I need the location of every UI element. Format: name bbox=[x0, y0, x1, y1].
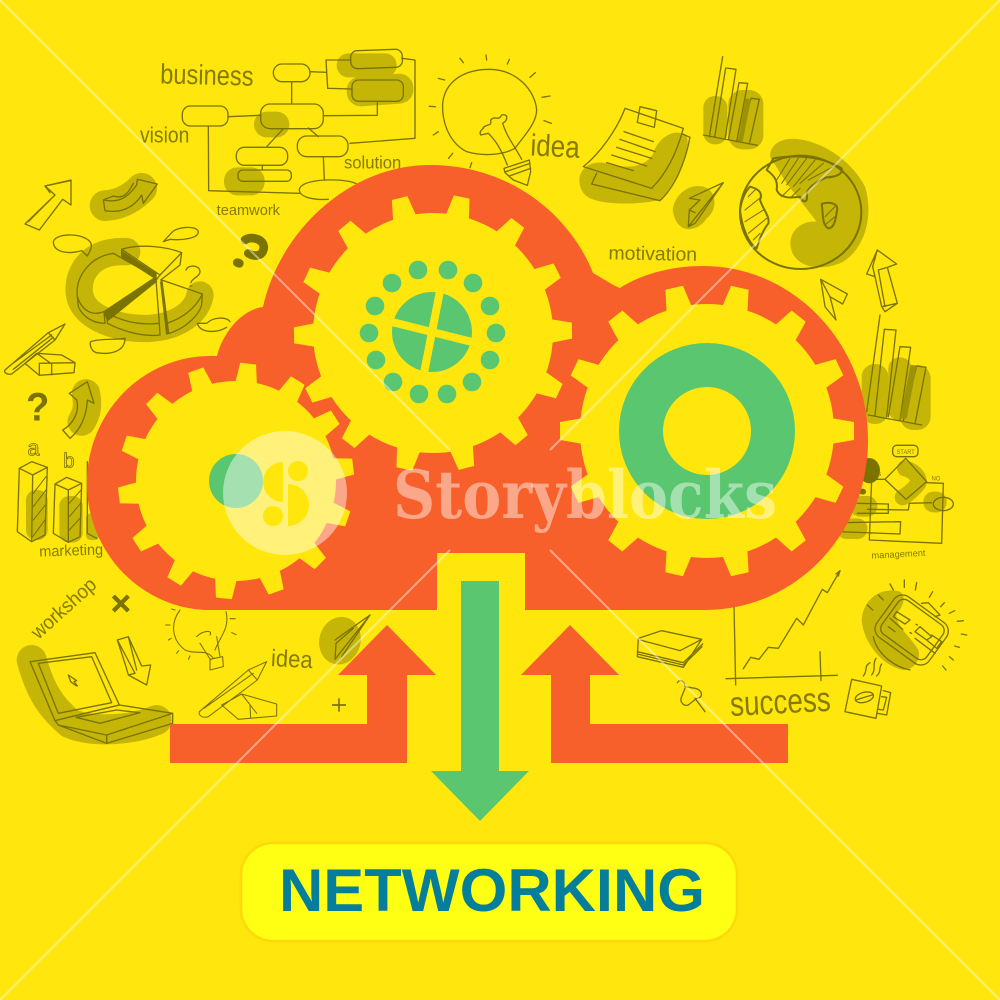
text: a: a bbox=[27, 435, 40, 460]
icon: question mark left: ? bbox=[26, 386, 49, 430]
cloud bbox=[87, 165, 868, 610]
icon: arrow down bbox=[117, 637, 151, 685]
text: teamwork: teamwork bbox=[217, 203, 281, 219]
icon: globe bbox=[740, 139, 868, 269]
text: business: business bbox=[160, 58, 254, 92]
text: start: START bbox=[897, 449, 915, 456]
icon: question mark bbox=[237, 238, 264, 263]
text: workshop: workshop bbox=[26, 574, 101, 644]
text: success: success bbox=[729, 681, 832, 724]
doodles: top right bbox=[429, 55, 931, 430]
doodles: left side bbox=[17, 382, 370, 743]
text: idea small: idea bbox=[270, 645, 314, 674]
text: idea: idea bbox=[530, 128, 581, 165]
text: solution: solution bbox=[344, 153, 401, 173]
arrow: orange left bbox=[170, 625, 436, 763]
label: networking bbox=[241, 843, 737, 941]
gear hub: quartered circle bbox=[386, 286, 478, 378]
text: marketing: marketing bbox=[39, 541, 103, 561]
text: plus bbox=[332, 698, 346, 712]
flowchart doodle bbox=[182, 49, 415, 199]
gear: centre bbox=[294, 195, 572, 471]
icon: 3d arrow left bbox=[63, 382, 94, 438]
icon: light bulb bbox=[429, 55, 551, 185]
icon: paper plane left bbox=[314, 612, 370, 669]
arrow: green down bbox=[431, 581, 529, 821]
icon: notes bbox=[579, 107, 690, 204]
gear: right bbox=[560, 285, 854, 577]
gear hub: left bbox=[209, 454, 263, 508]
management flowchart bbox=[837, 445, 953, 543]
icon: pencil and eraser bbox=[199, 662, 277, 719]
text: management: management bbox=[871, 548, 926, 561]
icon: bar chart top bbox=[703, 57, 763, 149]
text: motivation: motivation bbox=[608, 243, 697, 266]
doodles: top left bbox=[25, 49, 415, 353]
doodles: pencil and eraser upper left bbox=[5, 324, 75, 375]
text: vision: vision bbox=[140, 123, 189, 148]
icon: small bulb bbox=[166, 609, 236, 670]
dot ring bbox=[360, 261, 505, 403]
pie chart doodle bbox=[53, 227, 230, 353]
gear: left bbox=[118, 362, 354, 600]
line chart doodle bbox=[726, 571, 840, 685]
label text: NETWORKING bbox=[279, 857, 705, 924]
icon: 3d curved arrow bbox=[103, 179, 157, 211]
icon: pencil bbox=[5, 324, 65, 374]
icon: arrow up right bbox=[25, 180, 71, 230]
icon: bar chart right bbox=[862, 315, 931, 430]
arrow: orange right bbox=[521, 625, 788, 763]
text: yes: YES bbox=[871, 472, 882, 478]
icon: 3d bars a b bbox=[17, 462, 99, 543]
icon: smartwatch bbox=[862, 580, 967, 670]
doodles: right side bbox=[637, 445, 967, 724]
watermark logo bbox=[263, 461, 309, 526]
icon: cross bbox=[113, 596, 128, 611]
icon: eraser bbox=[25, 353, 75, 375]
gear hub: green ring bbox=[641, 365, 773, 497]
watermark text: Storyblocks bbox=[393, 456, 777, 534]
icon: paper plane bbox=[673, 183, 723, 229]
text: b: b bbox=[63, 450, 74, 472]
text: no: NO bbox=[932, 477, 941, 483]
icon: paper plane small bbox=[821, 279, 847, 320]
icon: arrow up bbox=[867, 250, 897, 312]
icon: laptop bbox=[30, 653, 173, 743]
icon: pin bbox=[677, 681, 705, 712]
icon: coffee mug bbox=[845, 658, 891, 718]
icon: books bbox=[637, 631, 703, 667]
